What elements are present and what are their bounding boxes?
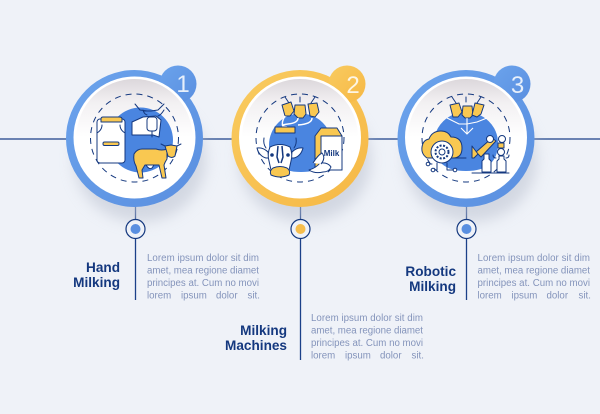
text block: robotic milking description: ipsum — [512, 290, 537, 302]
text block: milking machines description: lorem — [311, 350, 335, 362]
text block: hand milking description: amet, mea regione diamet — [147, 266, 259, 276]
timeline: horizontal and vertical connectors — [0, 139, 600, 360]
text block: milking machines description: principes at. Cum no movi — [311, 338, 423, 349]
cow head — [257, 138, 303, 177]
text block: hand milking description: Lorem ipsum dolor sit dim — [147, 253, 259, 264]
badge: number 1: 1 — [176, 71, 190, 98]
heading: hand milking: Hand — [86, 260, 120, 275]
text block: milking machines description: amet, mea regione diamet — [311, 326, 423, 336]
panel: hand milking circle — [66, 66, 206, 222]
text block: robotic milking description: lorem — [478, 290, 502, 302]
icon: robotic milking arm, cloud gear and bottles — [422, 94, 510, 182]
node: step 3 marker — [457, 220, 476, 238]
badge: number 2 — [328, 66, 366, 102]
heading: milking machines — [225, 323, 287, 353]
panel: milking machines circle — [232, 66, 371, 222]
text block: robotic milking description: sit. — [578, 290, 591, 302]
text block: milking machines description — [311, 313, 424, 362]
badge: number 3 — [494, 66, 530, 102]
heading: hand milking — [73, 260, 120, 290]
badge: number 1 — [160, 66, 196, 102]
heading: hand milking: Milking — [73, 275, 120, 290]
text block: hand milking description — [147, 253, 260, 302]
text block: hand milking description: dolor — [216, 290, 238, 302]
text block: robotic milking description: dolor — [546, 290, 569, 302]
text block: robotic milking description: principes at. Cum no movi — [478, 278, 590, 289]
icon: milking machine, cow and milk carton: Milk — [324, 149, 340, 158]
text block: robotic milking description: amet, mea regione diamet — [478, 266, 590, 276]
text block: hand milking description: principes at. Cum no movi — [147, 278, 259, 289]
text block: milking machines description: Lorem ipsum dolor sit dim — [311, 313, 423, 324]
badge: number 2: 2 — [346, 72, 360, 99]
badge: number 3: 3 — [511, 72, 524, 99]
text block: milking machines description: sit. — [412, 350, 424, 362]
text block: hand milking description: ipsum — [181, 290, 207, 302]
heading: milking machines: Milking — [240, 323, 287, 338]
text block: hand milking description: lorem — [147, 290, 171, 302]
text block: milking machines description: ipsum — [345, 350, 371, 362]
text block: robotic milking description — [478, 253, 591, 302]
heading: robotic milking: Robotic — [405, 264, 456, 279]
text block: hand milking description: sit. — [248, 290, 260, 302]
text block: robotic milking description: Lorem ipsum dolor sit dim — [478, 253, 590, 264]
text block: milking machines description: dolor — [380, 350, 402, 362]
node: step 1 marker — [126, 220, 145, 238]
heading: robotic milking: Milking — [409, 279, 456, 294]
heading: robotic milking — [405, 264, 456, 294]
icon: milking machine, cow and milk carton — [256, 94, 344, 182]
panel: robotic milking circle — [398, 66, 537, 222]
node: step 2 marker — [291, 220, 310, 238]
heading: milking machines: Machines — [225, 338, 287, 353]
icon: hand milking a cow — [90, 94, 181, 182]
